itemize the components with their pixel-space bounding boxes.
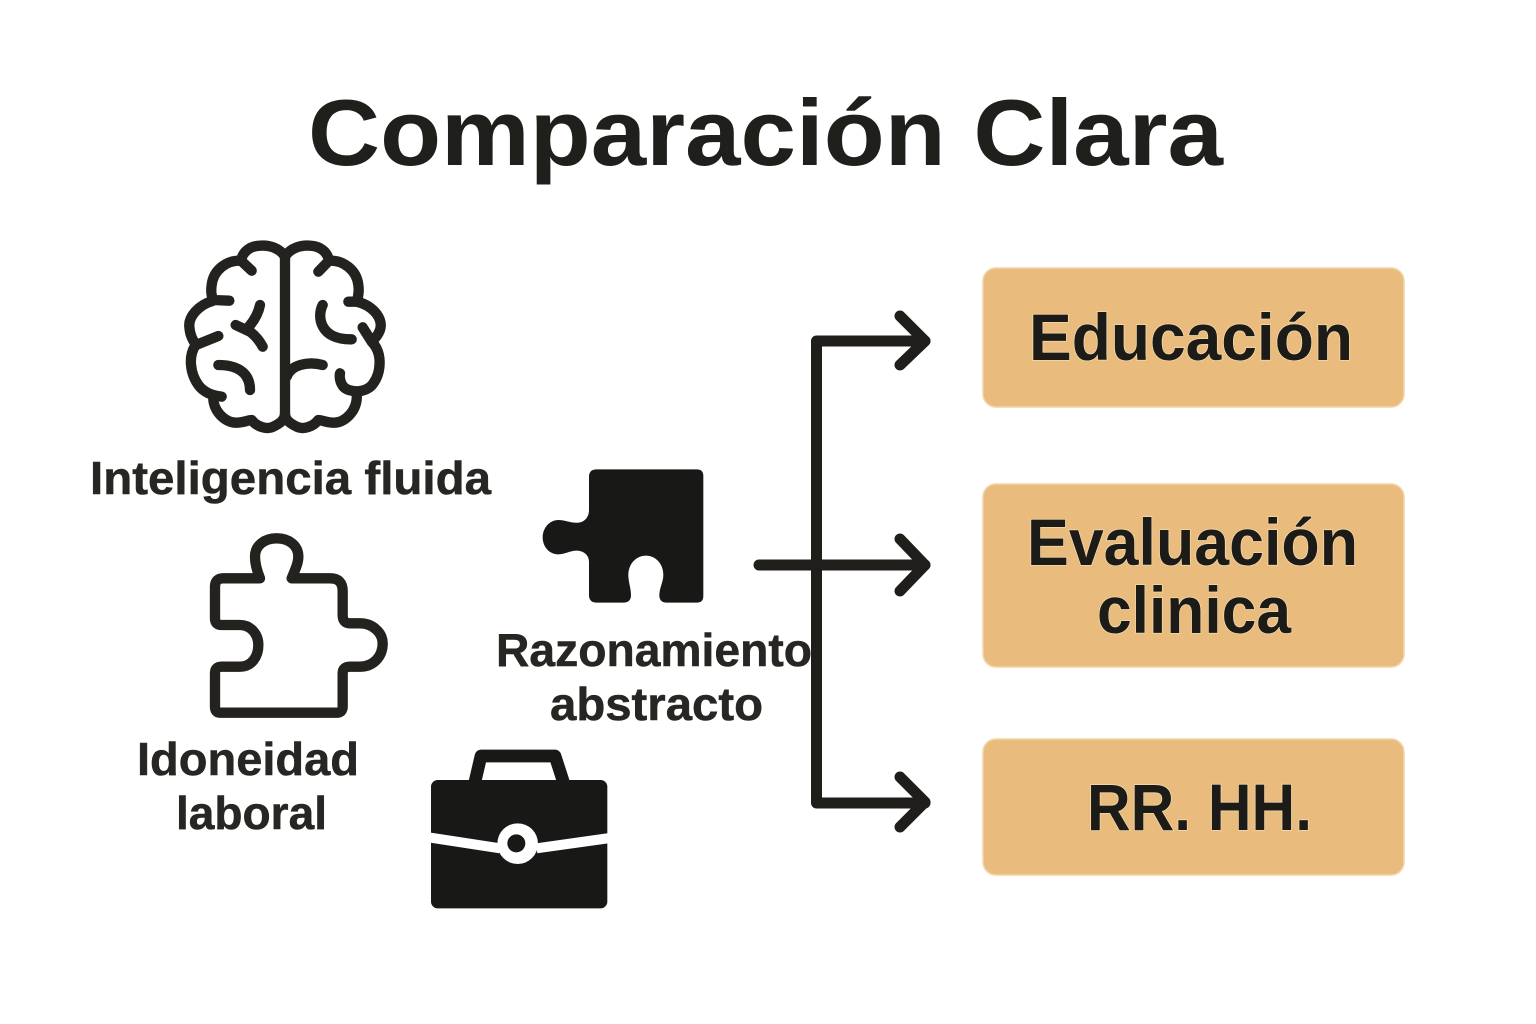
label: razonamiento abstracto: Razonamiento: [496, 624, 812, 676]
panel: educación: [983, 268, 1404, 407]
arrows: branching connector: [759, 316, 925, 827]
icon: puzzle outline: [215, 538, 383, 713]
panel: evaluación clínica: clinica: [1097, 573, 1292, 647]
label: razonamiento abstracto: [496, 624, 812, 730]
label: razonamiento abstracto: abstracto: [550, 678, 763, 730]
panel: educación: Educación: [1029, 300, 1353, 374]
icon: solid puzzle: [543, 469, 703, 603]
title: Comparación Clara: [308, 80, 1224, 185]
label: inteligencia fluida: Inteligencia fluida: [90, 452, 491, 504]
label: idoneidad laboral: laboral: [176, 787, 327, 839]
label: idoneidad laboral: [137, 733, 359, 839]
icon: brain outline: [189, 246, 381, 428]
panel: rr. hh.: [983, 739, 1404, 875]
panel: evaluación clínica: [983, 484, 1404, 667]
icon: briefcase: [428, 756, 610, 908]
label: idoneidad laboral: Idoneidad: [137, 733, 359, 785]
panel: evaluación clínica: Evaluación: [1027, 505, 1358, 579]
panel: rr. hh.: RR. HH.: [1087, 770, 1312, 844]
